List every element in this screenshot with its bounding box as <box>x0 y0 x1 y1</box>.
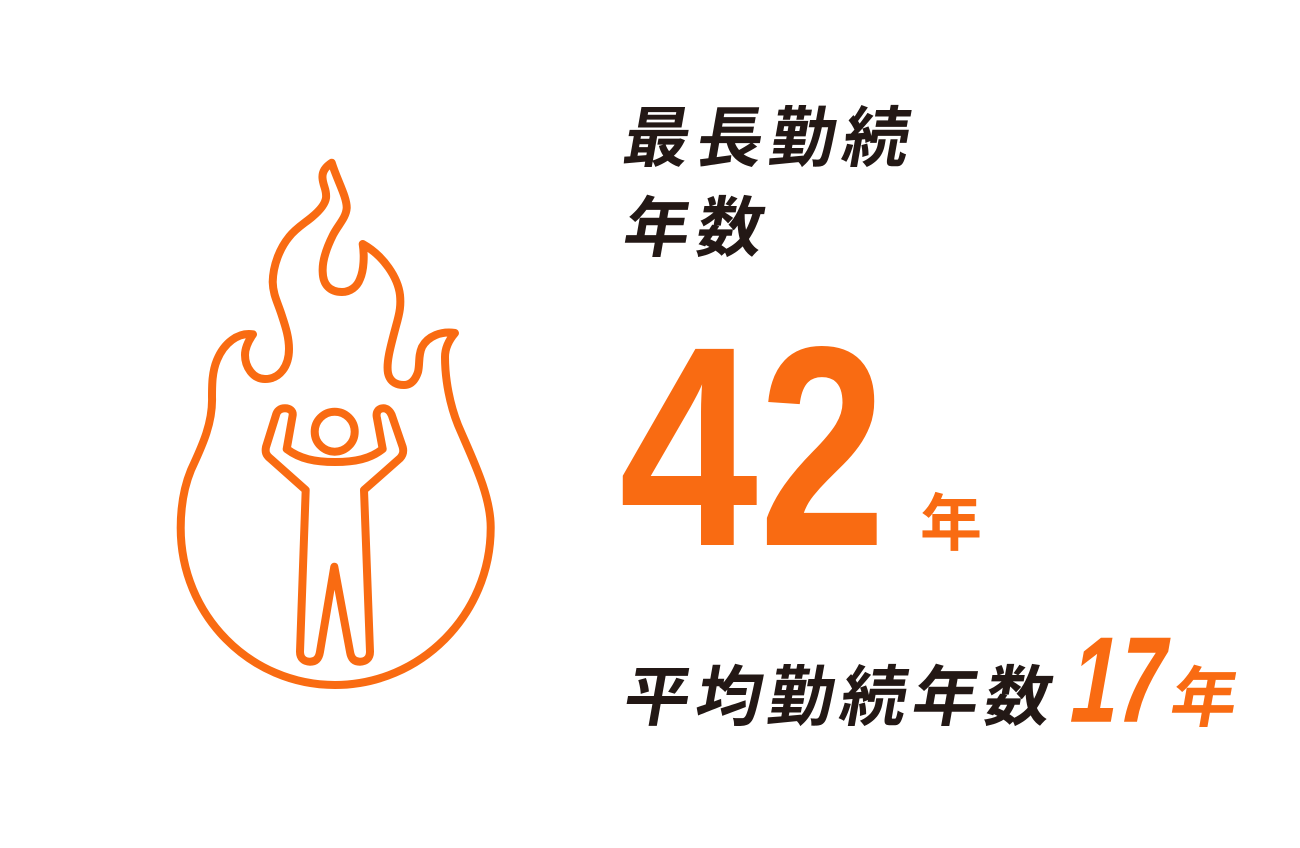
average tenure label: 平均勤続年数 <box>618 660 1065 734</box>
flame outline <box>181 163 491 685</box>
heading: longest tenure line 1: 最長勤続 <box>618 101 923 175</box>
heading: longest tenure line 2: 年数 <box>618 191 777 265</box>
average value: 17: 17 <box>1062 613 1178 747</box>
number: 42: 2 <box>759 288 886 606</box>
head <box>315 412 355 452</box>
average unit: year: 年 <box>1165 661 1244 735</box>
unit: year: 年 <box>920 490 982 559</box>
number: 42 <box>619 288 886 606</box>
number: 42: 4 <box>619 288 758 606</box>
body <box>266 408 403 662</box>
